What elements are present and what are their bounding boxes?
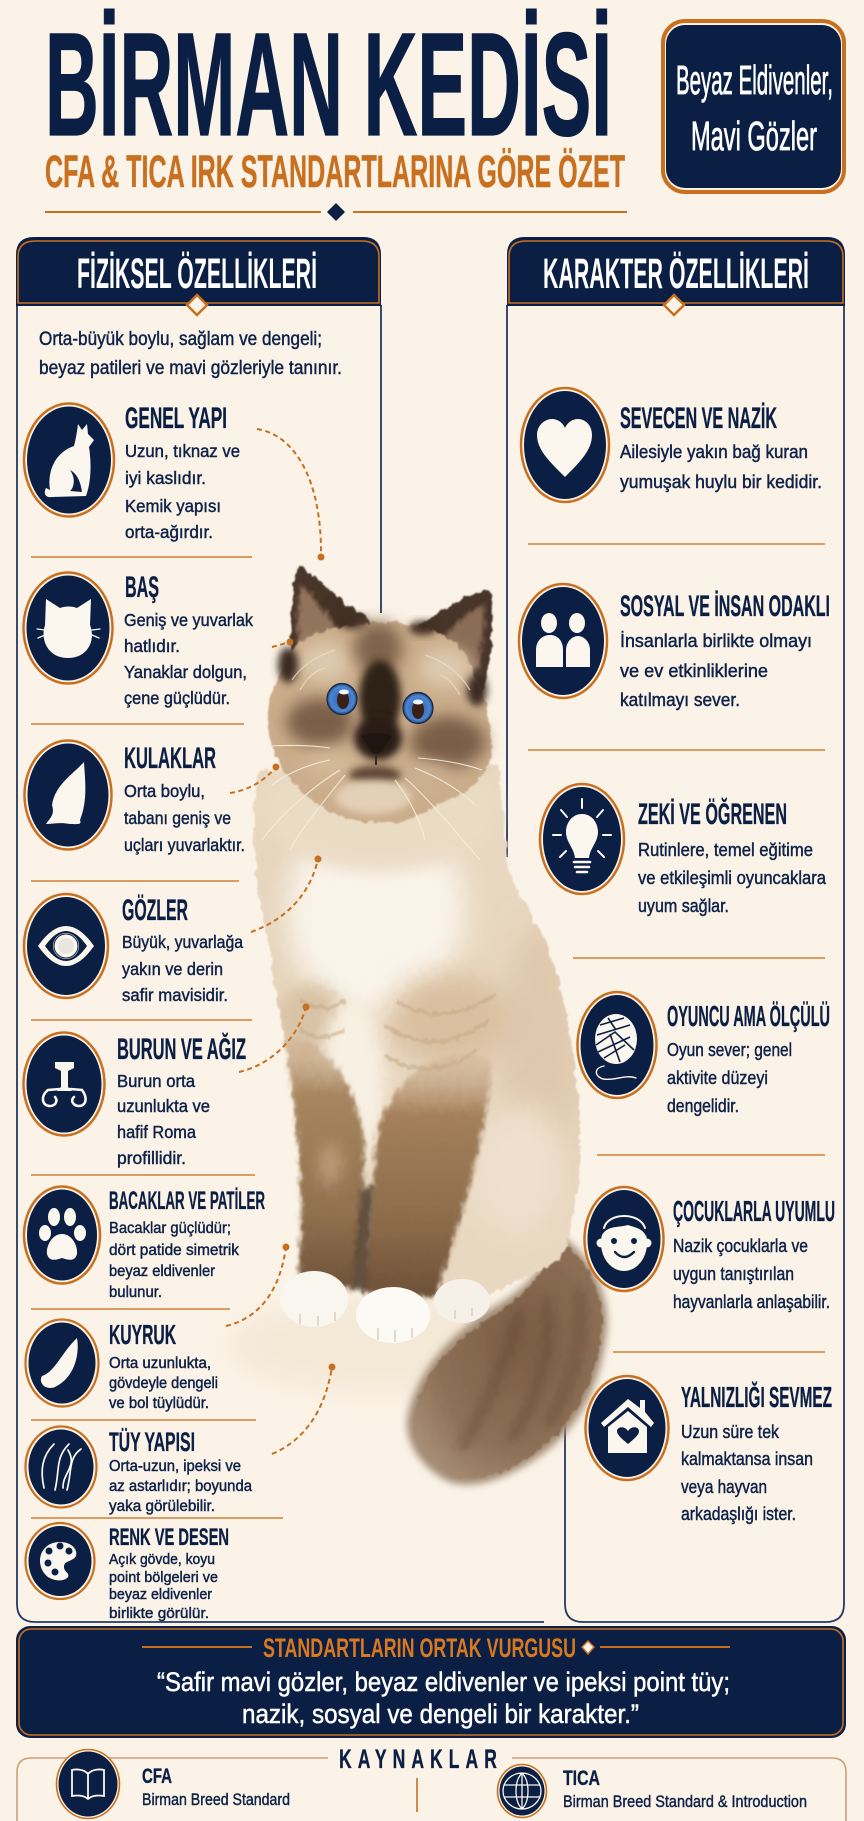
icon: tail [26,1320,98,1406]
title divider with diamond [45,203,627,221]
icon: cat face [24,572,112,684]
heading: physical traits: FİZİKSEL ÖZELLİKLERİ [77,250,317,298]
icon: yarn ball [578,992,656,1098]
item: legs and paws: beyaz eldivenler [109,1263,216,1280]
source: TICA [498,1764,807,1818]
item: eyes: GÖZLER [122,894,188,927]
item: coat: TÜY YAPISI [109,1427,195,1457]
item: head: Geniş ve yuvarlak [124,610,253,630]
item: eyes: safir mavisidir. [122,985,228,1005]
cat ears [290,565,492,710]
item: colour and pattern: point bölgeleri ve [109,1570,218,1586]
item: affectionate [521,388,822,502]
item: tail: Orta uzunlukta, [109,1355,211,1372]
icon: fur strands [26,1426,96,1508]
item: legs and paws: bulunur. [109,1284,162,1301]
item: dislikes being alone: veya hayvan [681,1477,767,1497]
icon: house with heart [586,1376,668,1480]
item: social: katılmayı sever. [620,690,740,710]
cat nose [361,733,392,754]
floor shadow [230,1297,560,1393]
item: head: Yanaklar dolgun, [124,662,247,682]
item: dislikes being alone: Uzun süre tek [681,1422,780,1442]
item: colour and pattern: birlikte görülür. [109,1606,209,1622]
icon: palette [26,1523,94,1599]
item: dislikes being alone: kalmaktansa insan [681,1449,813,1469]
item: colour and pattern: Açık gövde, koyu [109,1552,215,1568]
icon: heart [521,388,609,502]
item: ears: KULAKLAR [124,742,216,775]
item: colour and pattern [26,1523,229,1622]
panel: character traits frame [507,305,844,1622]
callout: shared emphasis of standards: STANDARTLARIN ORTAK VURGUSU [263,1633,576,1663]
item: legs and paws: dört patide simetrik [109,1242,240,1259]
intro text: beyaz patileri ve mavi gözleriyle tanınır. [39,358,342,379]
cat tail [407,1235,607,1484]
source: CFA [56,1750,290,1818]
icon: sitting cat [24,404,114,516]
item: smart: uyum sağlar. [638,896,729,916]
item: colour and pattern: RENK VE DESEN [109,1524,229,1551]
source: TICA: TICA [563,1767,600,1790]
item: coat: yaka görülebilir. [109,1498,215,1515]
item: ears: Orta boylu, [124,781,205,801]
left column dividers [31,557,283,1518]
cat head [262,615,492,860]
item: tail: ve bol tüylüdür. [109,1395,209,1412]
item: nose and mouth: Burun orta [117,1071,195,1091]
item: good with children: hayvanlarla anlaşabilir. [673,1292,830,1312]
item: coat: Orta-uzun, ipeksi ve [109,1458,241,1475]
cat eyes [327,684,357,714]
panel: sources [17,1743,846,1821]
item: smart: ve etkileşimli oyuncaklara [638,868,827,888]
callout: shared emphasis of standards: “Safir mavi gözler, beyaz eldivenler ve ipeksi point tüy; [157,1667,730,1697]
icon: child face [584,1187,664,1291]
item: good with children: uygun tanıştırılan [673,1264,794,1284]
cat body [254,765,582,1300]
item: nose and mouth: profillidir. [117,1148,186,1168]
item: good with children [584,1187,835,1312]
item: nose and mouth: BURUN VE AĞIZ [117,1032,246,1066]
item: playful: aktivite düzeyi [667,1068,768,1088]
item: coat: az astarlıdır; boyunda [109,1478,252,1495]
heading: character traits [507,237,845,315]
sources heading: KAYNAKLAR [339,1743,497,1774]
cat white paws [280,1271,490,1343]
item: eyes [24,894,243,1005]
callout: shared emphasis of standards [16,1626,846,1738]
icon: eye [24,894,108,998]
icon: paw [24,1186,100,1284]
item: social: ve ev etkinliklerine [620,661,768,681]
source: CFA: Birman Breed Standard [142,1790,290,1809]
heading: physical traits [16,237,381,315]
item: eyes: yakın ve derin [122,959,223,979]
cat whiskers [262,745,482,860]
item: head: çene güçlüdür. [124,688,230,708]
intro text: Orta-büyük boylu, sağlam ve dengeli; [39,329,322,350]
icon: light bulb [540,784,624,894]
item: nose and mouth: uzunlukta ve [117,1096,210,1116]
item: social: İnsanlarla birlikte olmayı [620,631,812,651]
item: playful [578,992,830,1116]
item: general structure: Uzun, tıknaz ve [125,441,240,461]
item: legs and paws [24,1186,265,1301]
item: general structure: Kemik yapısı [125,496,221,516]
item: ears: uçları yuvarlaktır. [124,835,245,855]
source: TICA: Birman Breed Standard & Introduction [563,1792,807,1811]
item: legs and paws: BACAKLAR VE PATİLER [109,1187,265,1215]
item: tail: KUYRUK [109,1319,176,1350]
item: smart: Rutinlere, temel eğitime [638,840,813,860]
item: general structure [24,402,240,542]
item: head: hatlıdır. [124,636,180,656]
intro text [39,329,342,379]
item: nose and mouth: hafif Roma [117,1122,196,1142]
source: CFA: CFA [142,1765,172,1788]
item: good with children: Nazik çocuklarla ve [673,1236,808,1256]
item: playful: dengelidir. [667,1096,739,1116]
icon: nose and muzzle [24,1032,104,1136]
icon: ear [24,740,112,850]
item: affectionate: yumuşak huylu bir kedidir. [620,472,822,492]
item: general structure: GENEL YAPI [125,402,227,435]
item: general structure: orta-ağırdır. [125,522,213,542]
item: eyes: Büyük, yuvarlağa [122,932,243,952]
item: coat [26,1426,252,1515]
item: dislikes being alone: arkadaşlığı ister. [681,1504,796,1524]
item: social [519,584,830,710]
icon: two people [519,584,607,698]
item: playful: Oyun sever; genel [667,1040,792,1060]
item: tail: gövdeyle dengeli [109,1375,218,1392]
item: head [24,571,253,708]
item: legs and paws: Bacaklar güçlüdür; [109,1220,231,1237]
item: ears: tabanı geniş ve [124,808,231,828]
badge: white gloves, blue eyes [663,21,844,192]
connector lines to the cat [226,429,336,1454]
item: dislikes being alone [586,1376,832,1524]
item: ears [24,740,245,855]
item: general structure: iyi kaslıdır. [125,468,206,488]
item: tail [26,1319,218,1412]
item: smart [540,784,827,916]
item: affectionate: Ailesiyle yakın bağ kuran [620,442,808,462]
item: colour and pattern: beyaz eldivenler [109,1587,212,1603]
item: nose and mouth [24,1032,246,1168]
cat front legs [284,1039,492,1298]
cat neck ruff [262,748,498,872]
item: head: BAŞ [125,571,159,604]
cat photo illustration [230,565,607,1484]
panel: physical traits frame [17,305,544,1622]
right column dividers [528,544,825,1352]
callout: shared emphasis of standards: nazik, sosyal ve dengeli bir karakter.” [242,1699,639,1729]
